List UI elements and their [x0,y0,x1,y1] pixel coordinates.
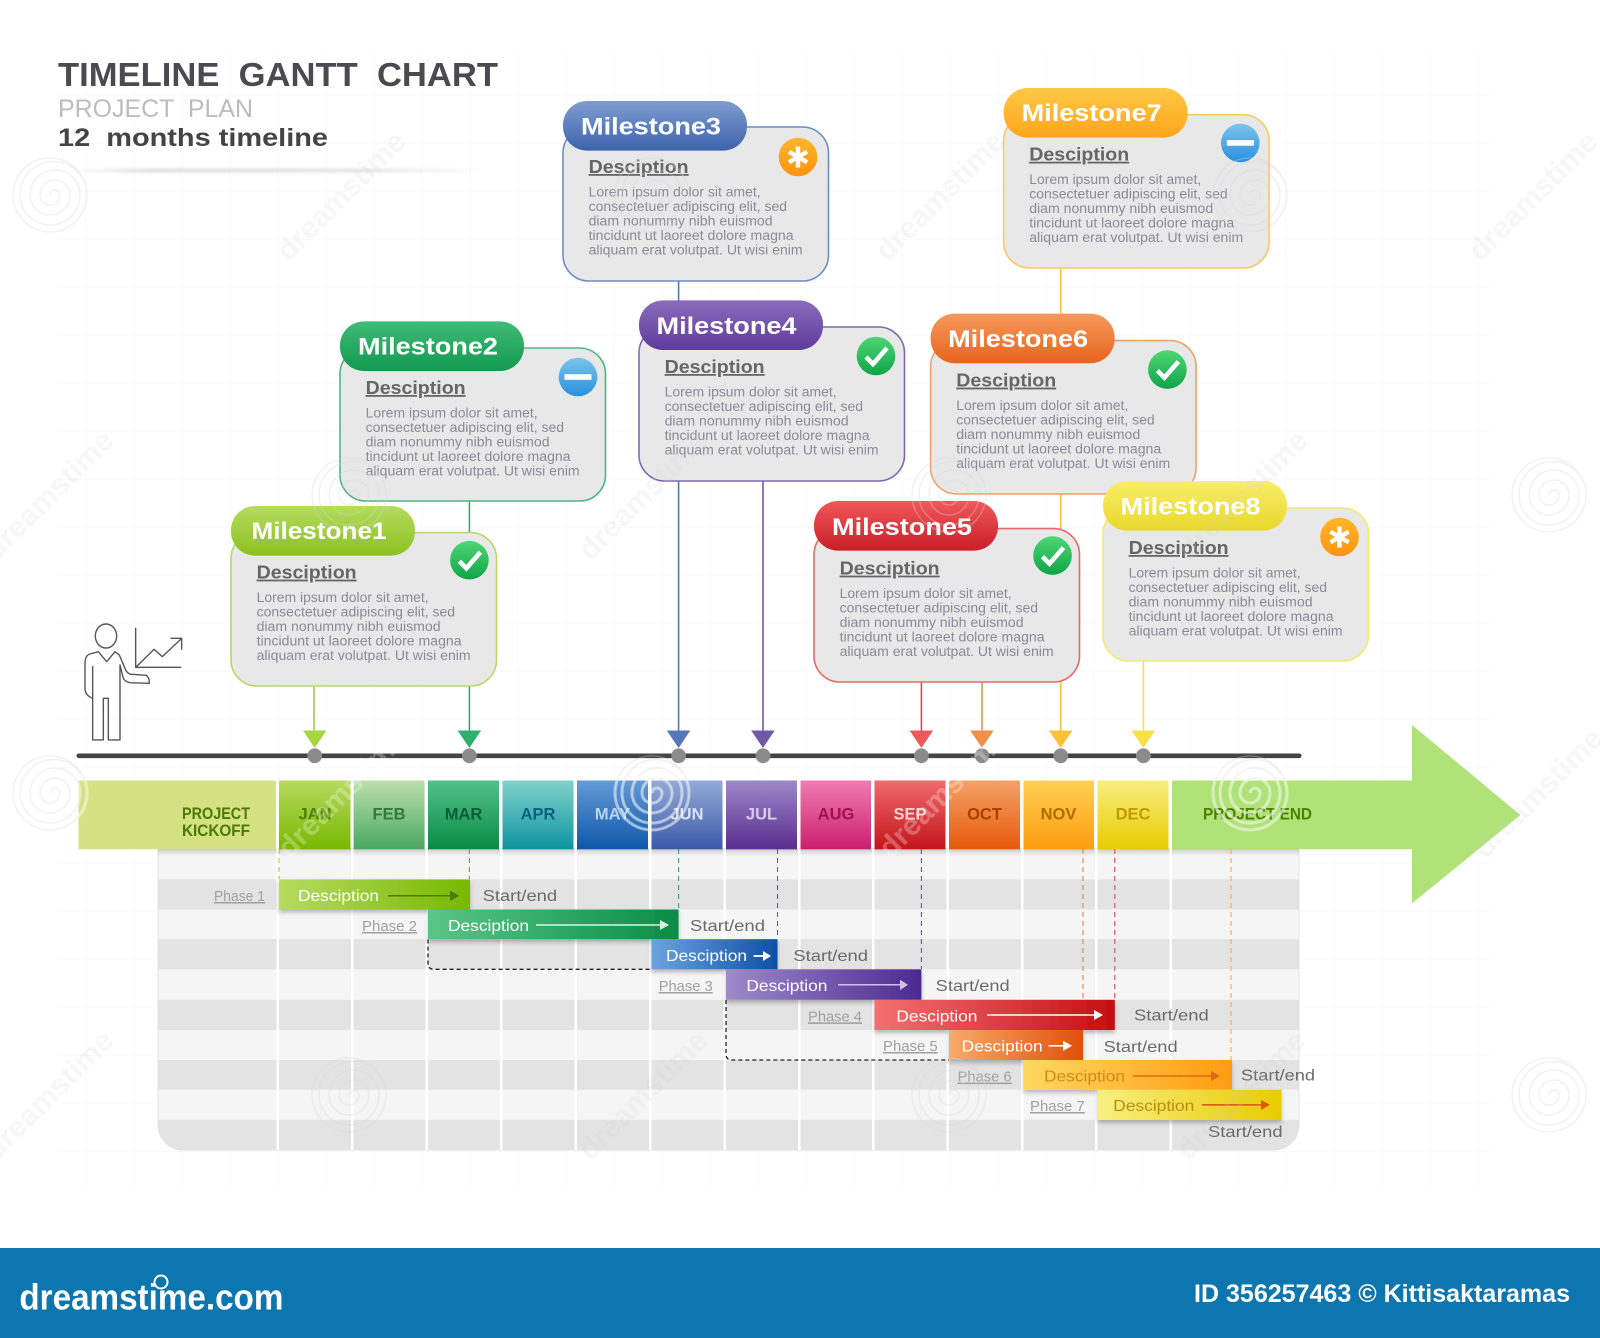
milestone 3 card: tincidunt ut laoreet dolore magna [589,228,794,243]
milestone 6 card: Lorem ipsum dolor sit amet, [956,398,1128,413]
timeline axis with arrows and dots [76,730,1302,763]
month blocks: AUG [818,806,854,824]
milestone 8 card: Lorem ipsum dolor sit amet, [1129,566,1301,580]
icon: check [1033,536,1072,575]
milestone 5 card: tincidunt ut laoreet dolore magna [840,630,1045,645]
phase 2 row: Start/end [690,918,765,935]
milestone 6 card [931,314,1196,494]
phase 5 row: Phase 5 [883,1038,938,1055]
milestone 6 card: Desciption [956,371,1056,391]
milestone 8 card: diam nonummy nibh euismod [1129,594,1313,610]
phase 1 row: Desciption [298,888,379,905]
phase 3 row: Phase 3 [659,978,713,995]
month blocks: APR [521,806,555,824]
milestone 5 card: Desciption [840,559,940,579]
milestone 8 pill [1103,481,1287,531]
milestone 5 pill [814,501,998,551]
footer logo: dreamstime.com [19,1276,283,1317]
milestone 1 card: Desciption [257,563,357,583]
icon: minus [1221,124,1260,162]
project kickoff block [78,780,276,849]
month blocks: NOV [1041,806,1076,824]
milestone 7 card: Desciption [1029,145,1129,165]
milestone 4 card: Desciption [665,357,765,377]
milestone 6 card: aliquam erat volutpat. Ut wisi enim [956,456,1170,471]
watermark text: dreamstime [572,424,714,566]
timeline arrow band: PROJECT END [1203,806,1312,824]
watermark text: dreamstime [270,125,412,267]
milestone 1 card: Milestone1 [252,518,386,545]
milestone 7 card: Milestone7 [1022,100,1162,127]
milestone 5 card: diam nonummy nibh euismod [840,615,1024,630]
milestone 5 card: aliquam erat volutpat. Ut wisi enim [840,644,1054,659]
phase 1 row: Phase 1 [214,888,265,905]
icon: check [1148,350,1187,389]
milestone 1 card: Lorem ipsum dolor sit amet, [257,590,429,605]
milestone 2 card: tincidunt ut laoreet dolore magna [366,449,571,464]
watermark text [0,125,1600,1166]
title underline shadow [70,169,490,172]
milestone 5 card: consectetuer adipiscing elit, sed [840,601,1038,616]
phase 4 row: Desciption [896,1008,977,1025]
milestone 4 card: aliquam erat volutpat. Ut wisi enim [665,442,879,458]
milestone 8 card: aliquam erat volutpat. Ut wisi enim [1129,624,1343,638]
timeline arrow band: PROJECT [182,805,250,823]
milestone 6 card: Milestone6 [948,326,1088,353]
milestone 7 card: diam nonummy nibh euismod [1029,201,1213,216]
phase 2 row: Phase 2 [362,918,417,935]
milestone 4 card: Milestone4 [656,313,797,340]
milestone 1 card: aliquam erat volutpat. Ut wisi enim [257,648,471,663]
month blocks: DEC [1116,806,1150,824]
milestone 7 card: aliquam erat volutpat. Ut wisi enim [1029,230,1243,245]
timeline arrow band [78,725,1520,903]
milestone 3 card: aliquam erat volutpat. Ut wisi enim [589,242,803,258]
blue bar row: Start/end [793,948,868,965]
watermark text: dreamstime [1170,1024,1312,1166]
phase 5 row: Desciption [962,1038,1043,1056]
duration line: 12 months timeline [58,124,328,152]
watermark text: dreamstime [1172,424,1314,566]
milestone 4 pill [639,300,823,350]
milestone 8 card: consectetuer adipiscing elit, sed [1129,580,1327,595]
blue bar row [652,939,868,969]
milestone 7 card: consectetuer adipiscing elit, sed [1029,187,1228,202]
watermark text: dreamstime [872,722,1014,864]
blue bar row: Desciption [666,948,747,965]
milestone 3 card [563,101,828,281]
milestone 8 card: tincidunt ut laoreet dolore magna [1129,609,1334,624]
phase 7 row: Desciption [1113,1098,1194,1115]
phase 4 row [808,1000,1209,1030]
milestone 2 card: diam nonummy nibh euismod [366,434,550,450]
month blocks: MAY [595,806,630,824]
phase 3 row: Desciption [746,978,827,995]
milestone 5 card [814,501,1080,682]
phase 2 row: Desciption [448,918,529,935]
milestone 2 card: Milestone2 [358,334,498,360]
phase 7 row: Phase 7 [1030,1098,1085,1115]
dashed guides [279,849,1231,1060]
gantt table background [158,849,1299,1150]
milestone 8 card [1103,481,1368,661]
milestone 3 card: Milestone3 [581,114,721,140]
milestone 3 card: consectetuer adipiscing elit, sed [589,199,787,214]
icon: check [450,541,489,580]
month blocks: FEB [372,806,406,824]
timeline arrow band: KICKOFF [182,822,250,840]
phase 3 row: Start/end [936,978,1010,995]
milestone 2 card: aliquam erat volutpat. Ut wisi enim [366,464,580,478]
title block [58,56,498,172]
milestone 4 card: tincidunt ut laoreet dolore magna [665,428,870,443]
phase 7 row: Start/end [1208,1124,1283,1141]
milestone 1 card [231,506,496,686]
milestone 2 card [340,321,606,501]
milestone 6 card: tincidunt ut laoreet dolore magna [956,442,1162,457]
watermark spirals [13,158,1586,1132]
title: TIMELINE GANTT CHART [58,56,498,93]
watermark text: dreamstime [271,722,413,864]
milestone 4 card [639,300,904,481]
phase 1 row: Start/end [483,888,557,905]
milestone 7 card: Lorem ipsum dolor sit amet, [1029,172,1201,187]
month blocks: OCT [967,806,1002,824]
icon: check [857,337,895,375]
connector lines [314,268,1143,735]
phase 4 row: Phase 4 [808,1008,862,1025]
milestone 3 card: Lorem ipsum dolor sit amet, [589,184,761,200]
milestone 3 card: Desciption [589,157,689,177]
milestone 6 pill [931,314,1115,363]
subtitle: PROJECT PLAN [58,95,253,123]
milestone 5 card: Milestone5 [832,514,972,541]
footer bar [0,1248,1600,1338]
milestone 6 card: diam nonummy nibh euismod [956,427,1140,442]
milestone 8 card: Desciption [1129,538,1229,558]
icon: asterisk [1320,518,1359,556]
phase 3 row [659,969,1010,1000]
phase 7 row [1030,1090,1283,1141]
month blocks [279,780,1168,849]
icon: minus [559,358,597,396]
phase 6 row: Desciption [1044,1069,1125,1086]
watermark text: dreamstime [572,1024,714,1166]
background grid [60,50,1490,1190]
milestone 3 pill [563,101,747,151]
milestone 5 card: Lorem ipsum dolor sit amet, [840,586,1012,601]
month blocks: JAN [298,806,332,824]
watermark text: dreamstime [869,125,1011,267]
milestone 2 pill [340,321,524,371]
milestone 2 card: Desciption [366,378,466,398]
milestone 1 pill [231,506,415,556]
milestone 1 card: diam nonummy nibh euismod [257,619,441,634]
phase 2 row [362,910,765,939]
phase 6 row: Phase 6 [958,1069,1012,1086]
milestone 3 card: diam nonummy nibh euismod [589,214,773,228]
watermark spirals over band [78,780,1289,832]
footer credit: ID 356257463 © Kittisaktaramas [1194,1280,1570,1308]
milestone 7 card: tincidunt ut laoreet dolore magna [1029,216,1235,231]
milestone 4 card: diam nonummy nibh euismod [665,414,849,428]
milestone 2 card: consectetuer adipiscing elit, sed [366,420,564,435]
month blocks: MAR [445,806,482,824]
project end arrow [1172,725,1520,903]
milestone 7 pill [1004,88,1188,138]
phase 1 row [214,879,557,910]
milestone 1 card: consectetuer adipiscing elit, sed [257,605,455,620]
icon: asterisk [779,138,817,176]
milestone 7 card [1004,88,1269,268]
milestone 6 card: consectetuer adipiscing elit, sed [956,413,1155,428]
icon: presenter with chart [85,624,182,740]
milestone 8 card: Milestone8 [1120,494,1260,520]
month blocks: SEP [893,806,927,824]
phase 6 row [958,1060,1315,1090]
month blocks: JUN [670,806,704,824]
milestone 4 card: consectetuer adipiscing elit, sed [665,399,863,414]
phase 5 row: Start/end [1104,1039,1178,1056]
milestone 1 card: tincidunt ut laoreet dolore magna [257,634,462,649]
phase 5 row [883,1030,1178,1060]
milestone 2 card: Lorem ipsum dolor sit amet, [366,406,538,420]
month blocks: JUL [746,806,777,824]
phase 6 row: Start/end [1241,1067,1315,1084]
milestone 4 card: Lorem ipsum dolor sit amet, [665,384,837,400]
phase 4 row: Start/end [1134,1008,1209,1025]
